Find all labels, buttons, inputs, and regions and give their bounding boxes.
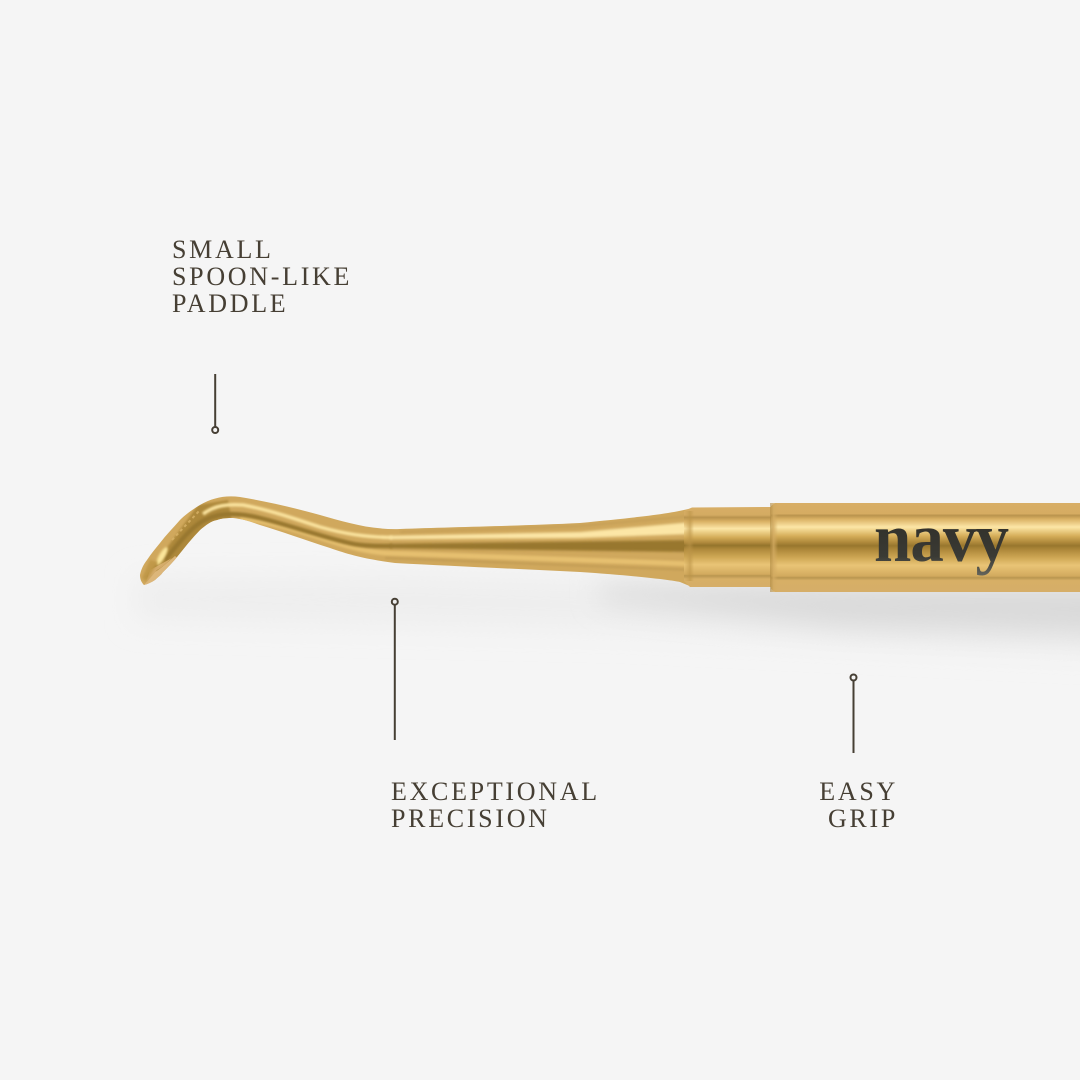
highlight line on neck [203, 505, 392, 538]
upper fine line [400, 516, 692, 532]
label text: EXCEPTIONAL [391, 777, 600, 806]
label text: SPOON-LIKE [172, 262, 352, 291]
label text [172, 235, 352, 318]
label text [391, 777, 600, 833]
callout: small spoon-like paddle [172, 235, 352, 433]
gold tool [140, 496, 1080, 592]
callout: exceptional precision [391, 599, 600, 833]
dark core band [165, 514, 392, 560]
label text: SMALL [172, 235, 274, 264]
paddle sheen [156, 546, 169, 566]
dark taper band [390, 540, 692, 552]
collar [684, 507, 771, 587]
label text: EASY [819, 777, 898, 806]
logo: navy [874, 500, 1008, 576]
fine lower line [385, 558, 692, 570]
pointer line [392, 599, 398, 740]
callout: easy grip [819, 674, 898, 833]
handle body [771, 503, 1080, 592]
paddle mottling [172, 510, 200, 540]
paddle tip [142, 546, 176, 585]
pointer line [212, 374, 218, 433]
tool neck and spoon-like paddle [140, 496, 690, 586]
highlight band on taper [390, 522, 692, 539]
label text: GRIP [828, 804, 898, 833]
label text: PRECISION [391, 804, 550, 833]
pointer line [850, 674, 856, 753]
paddle edge tone [142, 560, 158, 582]
lower glow band [240, 518, 692, 564]
label text: PADDLE [172, 289, 288, 318]
paddle facet [144, 556, 176, 585]
diagonal shaft tone [145, 500, 232, 578]
tool shadow [135, 575, 1080, 655]
label text [819, 777, 898, 833]
